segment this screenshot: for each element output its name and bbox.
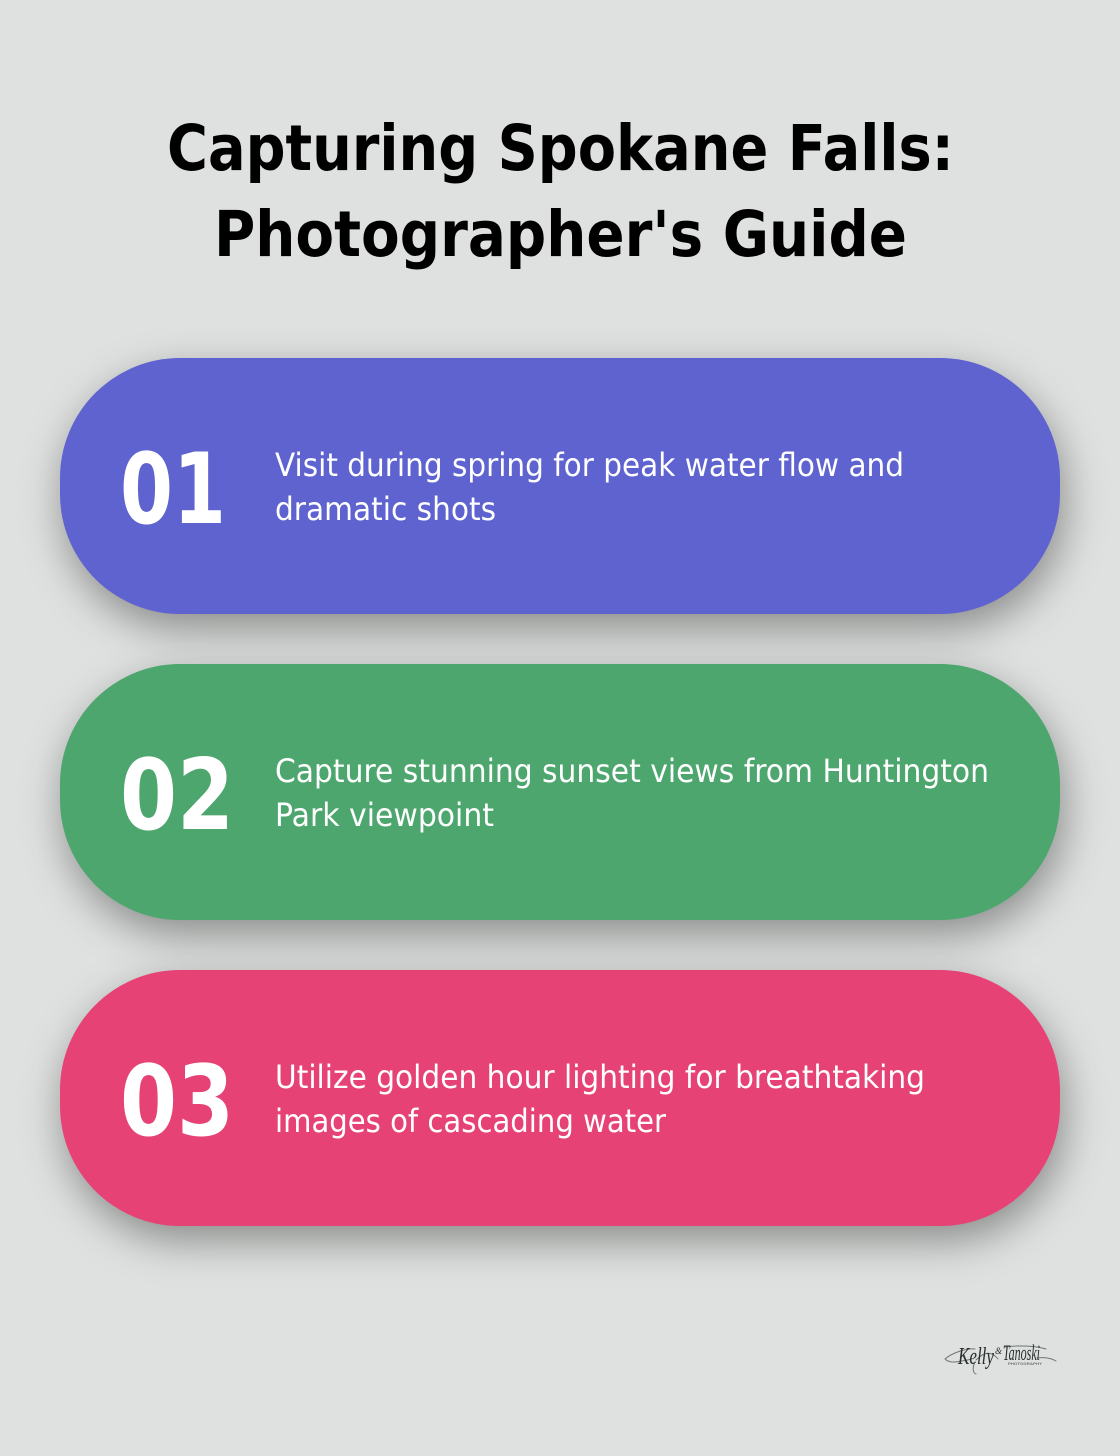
pill: step 3 background [60, 970, 1060, 1226]
title: Photographer's Guide [214, 198, 907, 271]
number: 02: 02 [120, 739, 234, 853]
logo: signature: Tanoski [1003, 1340, 1040, 1365]
text: step 1 description [275, 446, 904, 528]
text: step 1 description: dramatic shots [275, 490, 496, 528]
text: step 1 description: Visit during spring for peak water flow and [275, 446, 904, 484]
logo: signature: Kelly [957, 1344, 994, 1370]
text: step 3 description: images of cascading water [275, 1102, 667, 1140]
number: 03: 03 [120, 1045, 234, 1159]
logo: signature: PHOTOGRAPHY [1008, 1362, 1043, 1366]
panel: step 2 [60, 664, 1064, 935]
text: step 2 description [275, 752, 989, 834]
number: 01: 01 [120, 433, 226, 547]
text: step 3 description [275, 1058, 925, 1140]
panel: step 1 [60, 358, 1064, 629]
pill: step 1 background [60, 358, 1060, 614]
title [167, 112, 954, 271]
pill: step 2 background [60, 664, 1060, 920]
logo: signature [945, 1340, 1056, 1374]
text: step 2 description: Park viewpoint [275, 796, 494, 834]
panel: step 3 [60, 970, 1064, 1241]
text: step 2 description: Capture stunning sunset views from Huntington [275, 752, 989, 790]
text: step 3 description: Utilize golden hour lighting for breathtaking [275, 1058, 925, 1096]
title: Capturing Spokane Falls: [167, 112, 954, 185]
logo: signature: & [995, 1346, 1002, 1356]
